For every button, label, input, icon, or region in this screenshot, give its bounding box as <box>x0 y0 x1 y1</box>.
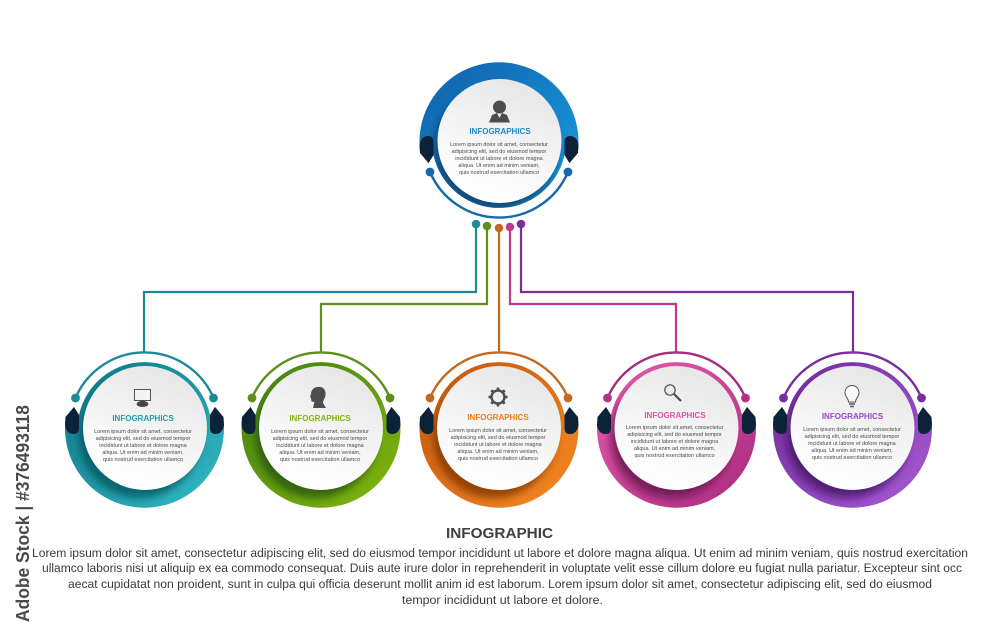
top circle disc <box>438 79 562 203</box>
text block: description: aecat cupidatat non proident, sunt in culpa qui officia deserunt mollit anim id est laborum. Lorem ipsum dolor sit amet, consectetur adipiscing elit, sed do eiusmod <box>68 577 932 591</box>
pink body text: adipisicing elit, sed do eiusmod tempor <box>627 432 722 438</box>
pink body text: Lorem ipsum dolor sit amet, consectetur <box>626 425 724 431</box>
teal title: INFOGRAPHICS <box>112 414 174 423</box>
pink body text: aliqua. Ut enim ad minim veniam, <box>634 446 716 452</box>
pink body text <box>626 425 724 459</box>
icon: monitor <box>134 390 150 407</box>
orange body text: adipisicing elit, sed do eiusmod tempor <box>451 435 546 441</box>
stock id label: Adobe Stock | #376493118 <box>13 405 33 622</box>
green ring <box>242 352 400 508</box>
panel: orange circle <box>420 352 578 508</box>
teal body text: adipisicing elit, sed do eiusmod tempor <box>96 436 191 442</box>
purple body text: adipisicing elit, sed do eiusmod tempor <box>805 434 900 440</box>
panel: pink circle <box>597 352 756 508</box>
purple body text <box>803 427 901 461</box>
orange body text <box>449 428 547 462</box>
top circle body text: incididunt ut labore et dolore magna <box>455 156 544 162</box>
top circle body text <box>450 142 548 176</box>
teal body text: incididunt ut labore et dolore magna <box>99 443 188 449</box>
top circle body text: aliqua. Ut enim ad minim veniam, <box>458 163 540 169</box>
purple body text: incididunt ut labore et dolore magna <box>808 441 897 447</box>
pink body text: incididunt ut labore et dolore magna <box>631 439 719 445</box>
pink title: INFOGRAPHICS <box>644 411 706 420</box>
purple title: INFOGRAPHICS <box>822 412 884 421</box>
green title: INFOGRAPHICS <box>289 414 351 423</box>
top circle body text: Lorem ipsum dolor sit amet, consectetur <box>450 142 548 148</box>
teal disc <box>83 366 207 490</box>
icon: light bulb <box>845 386 859 406</box>
orange body text: quis nostrud exercitation ullamco <box>458 456 538 462</box>
heading: infographic: INFOGRAPHIC <box>446 526 554 542</box>
top circle ring <box>420 62 578 218</box>
pink disc <box>614 366 738 490</box>
text block: description: ullamco laboris nisi ut aliquip ex ea commodo consequat. Duis aute irure dolor in reprehenderit in voluptate velit esse cillum dolore eu fugiat nulla pariatur. Excepteur sint occ <box>42 561 962 575</box>
top circle title: INFOGRAPHICS <box>469 127 531 136</box>
green body text: Lorem ipsum dolor sit amet, consectetur <box>271 429 369 435</box>
pink ring <box>597 352 756 508</box>
teal body text: Lorem ipsum dolor sit amet, consectetur <box>94 429 192 435</box>
icon: magnifier <box>665 385 681 401</box>
teal body text <box>94 429 192 463</box>
green disc <box>259 366 383 490</box>
panel: top circle <box>420 62 578 218</box>
green body text: aliqua. Ut enim ad minim veniam, <box>279 450 361 456</box>
icon: gear <box>488 388 508 406</box>
text block: description: Lorem ipsum dolor sit amet, consectetur adipiscing elit, sed do eiusmod tempor incididunt ut labore et dolore magna aliqua. Ut enim ad minim veniam, quis nostrud exercitation <box>32 546 968 560</box>
pink body text: quis nostrud exercitation ullamco <box>634 453 715 459</box>
purple body text: Lorem ipsum dolor sit amet, consectetur <box>803 427 901 433</box>
green body text: adipisicing elit, sed do eiusmod tempor <box>273 436 368 442</box>
green body text: quis nostrud exercitation ullamco <box>280 457 360 463</box>
green body text: incididunt ut labore et dolore magna <box>276 443 365 449</box>
text block: description: tempor incididunt ut labore et dolore. <box>402 593 603 607</box>
teal ring <box>65 352 224 508</box>
purple ring <box>773 352 932 508</box>
orange disc <box>437 366 561 490</box>
teal body text: quis nostrud exercitation ullamco <box>103 457 183 463</box>
panel: teal circle <box>65 352 224 508</box>
orange ring <box>420 352 578 508</box>
icon: person <box>489 100 510 122</box>
orange body text: incididunt ut labore et dolore magna <box>454 442 543 448</box>
teal body text: aliqua. Ut enim ad minim veniam, <box>102 450 184 456</box>
purple body text: aliqua. Ut enim ad minim veniam, <box>811 448 893 454</box>
icon: head silhouette <box>310 387 326 408</box>
text block: description <box>32 546 968 607</box>
panel: green circle <box>242 352 400 508</box>
orange body text: Lorem ipsum dolor sit amet, consectetur <box>449 428 547 434</box>
purple body text: quis nostrud exercitation ullamco <box>812 455 892 461</box>
connector lines <box>144 220 853 352</box>
top circle body text: adipisicing elit, sed do eiusmod tempor <box>452 149 547 155</box>
green body text <box>271 429 369 463</box>
orange title: INFOGRAPHICS <box>467 413 529 422</box>
top circle body text: quis nostrud exercitation ullamco <box>459 170 539 176</box>
panel: purple circle <box>773 352 932 508</box>
orange body text: aliqua. Ut enim ad minim veniam, <box>457 449 539 455</box>
purple disc <box>790 366 914 490</box>
